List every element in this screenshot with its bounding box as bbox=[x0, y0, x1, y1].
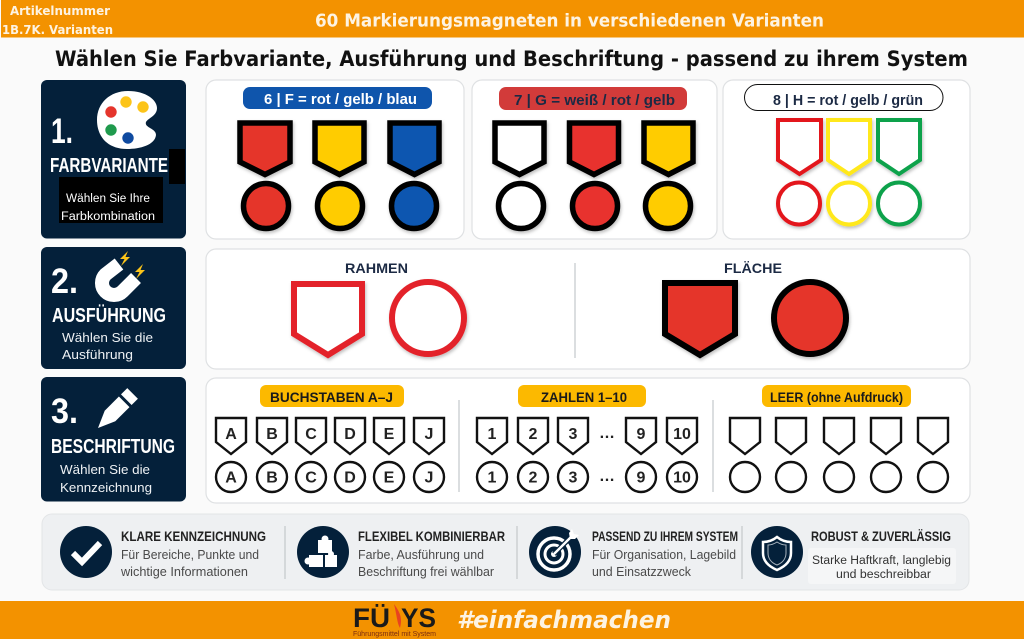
label: Fläche: FLÄCHE bbox=[724, 261, 782, 276]
benefit: flexible: FLEXIBEL KOMBINIERBAR bbox=[358, 528, 505, 544]
panel: variant 7 G bbox=[472, 80, 717, 239]
benefit: robust: Starke Haftkraft, langlebig bbox=[812, 555, 951, 567]
group: numbers 1-10: 9 bbox=[637, 470, 646, 486]
benefit: clear marking: Für Bereiche, Punkte und bbox=[121, 547, 259, 562]
panel: step 2 Ausführung: 2. bbox=[51, 262, 78, 301]
group: blank magnets bbox=[730, 385, 948, 492]
group: numbers 1-10: 10 bbox=[673, 470, 691, 486]
hashtag: #einfachmachen bbox=[457, 606, 671, 634]
icon: pencil bbox=[98, 388, 138, 428]
icon: palette bbox=[97, 91, 157, 149]
group: numbers 1-10: 1 bbox=[488, 426, 497, 443]
article number bbox=[2, 4, 113, 37]
panel: step 1 Farbvariante: Farbkombination bbox=[61, 211, 155, 223]
group: letters A-J: E bbox=[384, 426, 395, 443]
panel: variant 6 F bbox=[206, 80, 464, 239]
group: numbers 1-10: ZAHLEN 1–10 bbox=[541, 390, 627, 405]
group: letters A-J: J bbox=[425, 426, 433, 443]
panel: step 3 Beschriftung: BESCHRIFTUNG bbox=[51, 436, 175, 458]
group: blank magnets: LEER (ohne Aufdruck) bbox=[770, 390, 903, 405]
group: numbers 1-10: 2 bbox=[529, 470, 538, 486]
header title: 60 Markierungsmagneten in verschiedenen Varianten bbox=[315, 10, 824, 32]
panel: Beschriftung options bbox=[206, 378, 970, 503]
group: numbers 1-10: 2 bbox=[529, 426, 538, 443]
group: numbers 1-10: 3 bbox=[569, 470, 578, 486]
panel: step 3 Beschriftung: Wählen Sie die bbox=[60, 462, 150, 477]
panel: step 1 Farbvariante: 1. bbox=[51, 112, 73, 151]
logo: FÜSYS: Führungsmittel mit System bbox=[353, 631, 436, 638]
group: letters A-J: BUCHSTABEN A–J bbox=[270, 390, 393, 405]
benefit: robust: ROBUST & ZUVERLÄSSIG bbox=[811, 528, 951, 544]
group: numbers 1-10: 9 bbox=[637, 426, 646, 443]
panel: step 2 Ausführung: AUSFÜHRUNG bbox=[52, 304, 166, 327]
benefit: fits your system: und Einsatzzweck bbox=[592, 564, 691, 579]
icon: frame pin and circle bbox=[294, 282, 464, 355]
panel: step 1 Farbvariante: FARBVARIANTE bbox=[50, 155, 168, 177]
benefit: flexible: Farbe, Ausführung und bbox=[358, 547, 484, 562]
benefit: fits your system: Für Organisation, Lagebild bbox=[592, 547, 736, 562]
benefit: robust bbox=[751, 526, 956, 584]
benefit: clear marking bbox=[60, 526, 266, 579]
group: letters A-J bbox=[216, 385, 444, 492]
article number: 1B.7K. Varianten bbox=[2, 23, 113, 37]
benefit: fits your system: PASSEND ZU IHREM SYSTEM bbox=[592, 528, 738, 544]
panel: Ausführung options bbox=[206, 249, 970, 369]
header bar bbox=[1, 0, 1024, 38]
group: numbers 1-10 bbox=[477, 385, 697, 492]
group: letters A-J: C bbox=[305, 470, 317, 486]
panel: step 2 Ausführung bbox=[41, 247, 186, 369]
panel: step 1 Farbvariante bbox=[41, 80, 186, 238]
group: numbers 1-10: 1 bbox=[488, 470, 497, 486]
group: numbers 1-10: … bbox=[599, 425, 615, 442]
group: letters A-J: D bbox=[344, 426, 356, 443]
panel: step 1 Farbvariante: Wählen Sie Ihre bbox=[66, 193, 150, 205]
group: letters A-J: B bbox=[266, 470, 278, 486]
panel: variant 8 H: 8 | H = rot / gelb / grün bbox=[773, 93, 923, 109]
logo: FÜSYS: FÜ bbox=[353, 603, 390, 633]
panel: step 3 Beschriftung: Kennzeichnung bbox=[60, 480, 152, 495]
label: Rahmen: RAHMEN bbox=[345, 261, 408, 276]
group: numbers 1-10: … bbox=[599, 468, 615, 485]
group: numbers 1-10: 10 bbox=[673, 426, 691, 443]
group: letters A-J: E bbox=[384, 470, 395, 486]
article number: Artikelnummer bbox=[10, 4, 110, 18]
panel: variant 7 G: 7 | G = weiß / rot / gelb bbox=[514, 93, 675, 109]
panel: step 2 Ausführung: Wählen Sie die bbox=[62, 330, 153, 345]
benefit: clear marking: KLARE KENNZEICHNUNG bbox=[121, 528, 266, 544]
panel: step 2 Ausführung: Ausführung bbox=[62, 347, 133, 362]
benefit: fits your system bbox=[529, 526, 738, 579]
panel: benefits band bbox=[42, 514, 969, 590]
icon: filled pin and circle bbox=[665, 282, 846, 355]
panel: step 3 Beschriftung: 3. bbox=[51, 392, 78, 431]
icon: magnet bbox=[102, 251, 145, 295]
benefit: robust: und beschreibbar bbox=[836, 569, 931, 581]
benefit: clear marking: wichtige Informationen bbox=[120, 564, 248, 579]
benefit: flexible: Beschriftung frei wählbar bbox=[358, 564, 495, 579]
group: letters A-J: A bbox=[225, 470, 237, 486]
logo: FÜSYS bbox=[353, 603, 436, 638]
panel: variant 8 H bbox=[723, 80, 970, 239]
panel: step 3 Beschriftung bbox=[41, 377, 186, 502]
footer bar bbox=[0, 601, 1024, 639]
group: numbers 1-10: 3 bbox=[569, 426, 578, 443]
group: letters A-J: D bbox=[344, 470, 356, 486]
logo: FÜSYS: YS bbox=[401, 603, 436, 633]
panel: variant 6 F: 6 | F = rot / gelb / blau bbox=[264, 92, 417, 108]
group: letters A-J: A bbox=[225, 426, 237, 443]
group: letters A-J: B bbox=[266, 426, 278, 443]
group: letters A-J: J bbox=[425, 470, 433, 486]
group: letters A-J: C bbox=[305, 426, 317, 443]
benefit: flexible bbox=[297, 526, 505, 579]
